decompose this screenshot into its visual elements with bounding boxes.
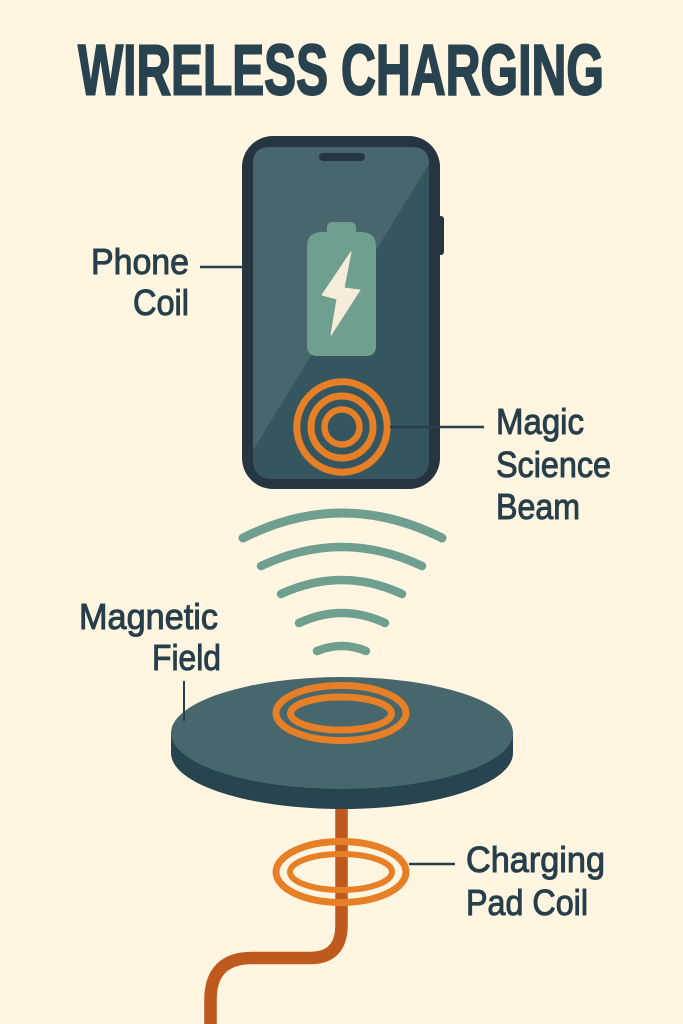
- lightning bolt: [322, 252, 360, 335]
- label: magic science beam: [496, 401, 611, 527]
- charging pad: [171, 677, 513, 809]
- label: charging pad coil: [466, 839, 605, 923]
- magnetic field waves: [243, 513, 442, 651]
- label: magnetic field: [79, 596, 221, 678]
- phone coil rings: [297, 382, 387, 472]
- phone coil leader line: [200, 266, 243, 268]
- label: phone coil: [91, 241, 189, 323]
- label: magic science beam: Magic: [496, 401, 584, 442]
- magic science beam leader line: [390, 426, 484, 428]
- charging pad coil leader line: [409, 863, 455, 865]
- title: WIRELESS: [78, 32, 328, 110]
- phone side button: [436, 216, 444, 255]
- magnetic field leader line: [183, 681, 185, 721]
- phone body: [242, 136, 440, 489]
- label: phone coil: Coil: [133, 282, 189, 323]
- label: charging pad coil: Charging: [466, 839, 605, 880]
- label: charging pad coil: Pad Coil: [466, 882, 588, 923]
- label: magic science beam: Beam: [496, 486, 580, 527]
- label: magnetic field: Field: [152, 637, 221, 678]
- battery icon: [307, 222, 376, 356]
- phone screen: [253, 147, 429, 479]
- pad top: [171, 677, 513, 789]
- charging pad coil rings: [276, 842, 406, 902]
- screen highlight: [253, 147, 429, 450]
- phone: [242, 136, 444, 489]
- phone notch: [319, 153, 365, 161]
- label: magic science beam: Science: [496, 444, 611, 485]
- pad side: [171, 733, 513, 809]
- charging cable: [210, 805, 342, 1024]
- pad coil rings: [276, 686, 406, 740]
- label: phone coil: Phone: [91, 241, 189, 282]
- label: magnetic field: Magnetic: [79, 596, 218, 637]
